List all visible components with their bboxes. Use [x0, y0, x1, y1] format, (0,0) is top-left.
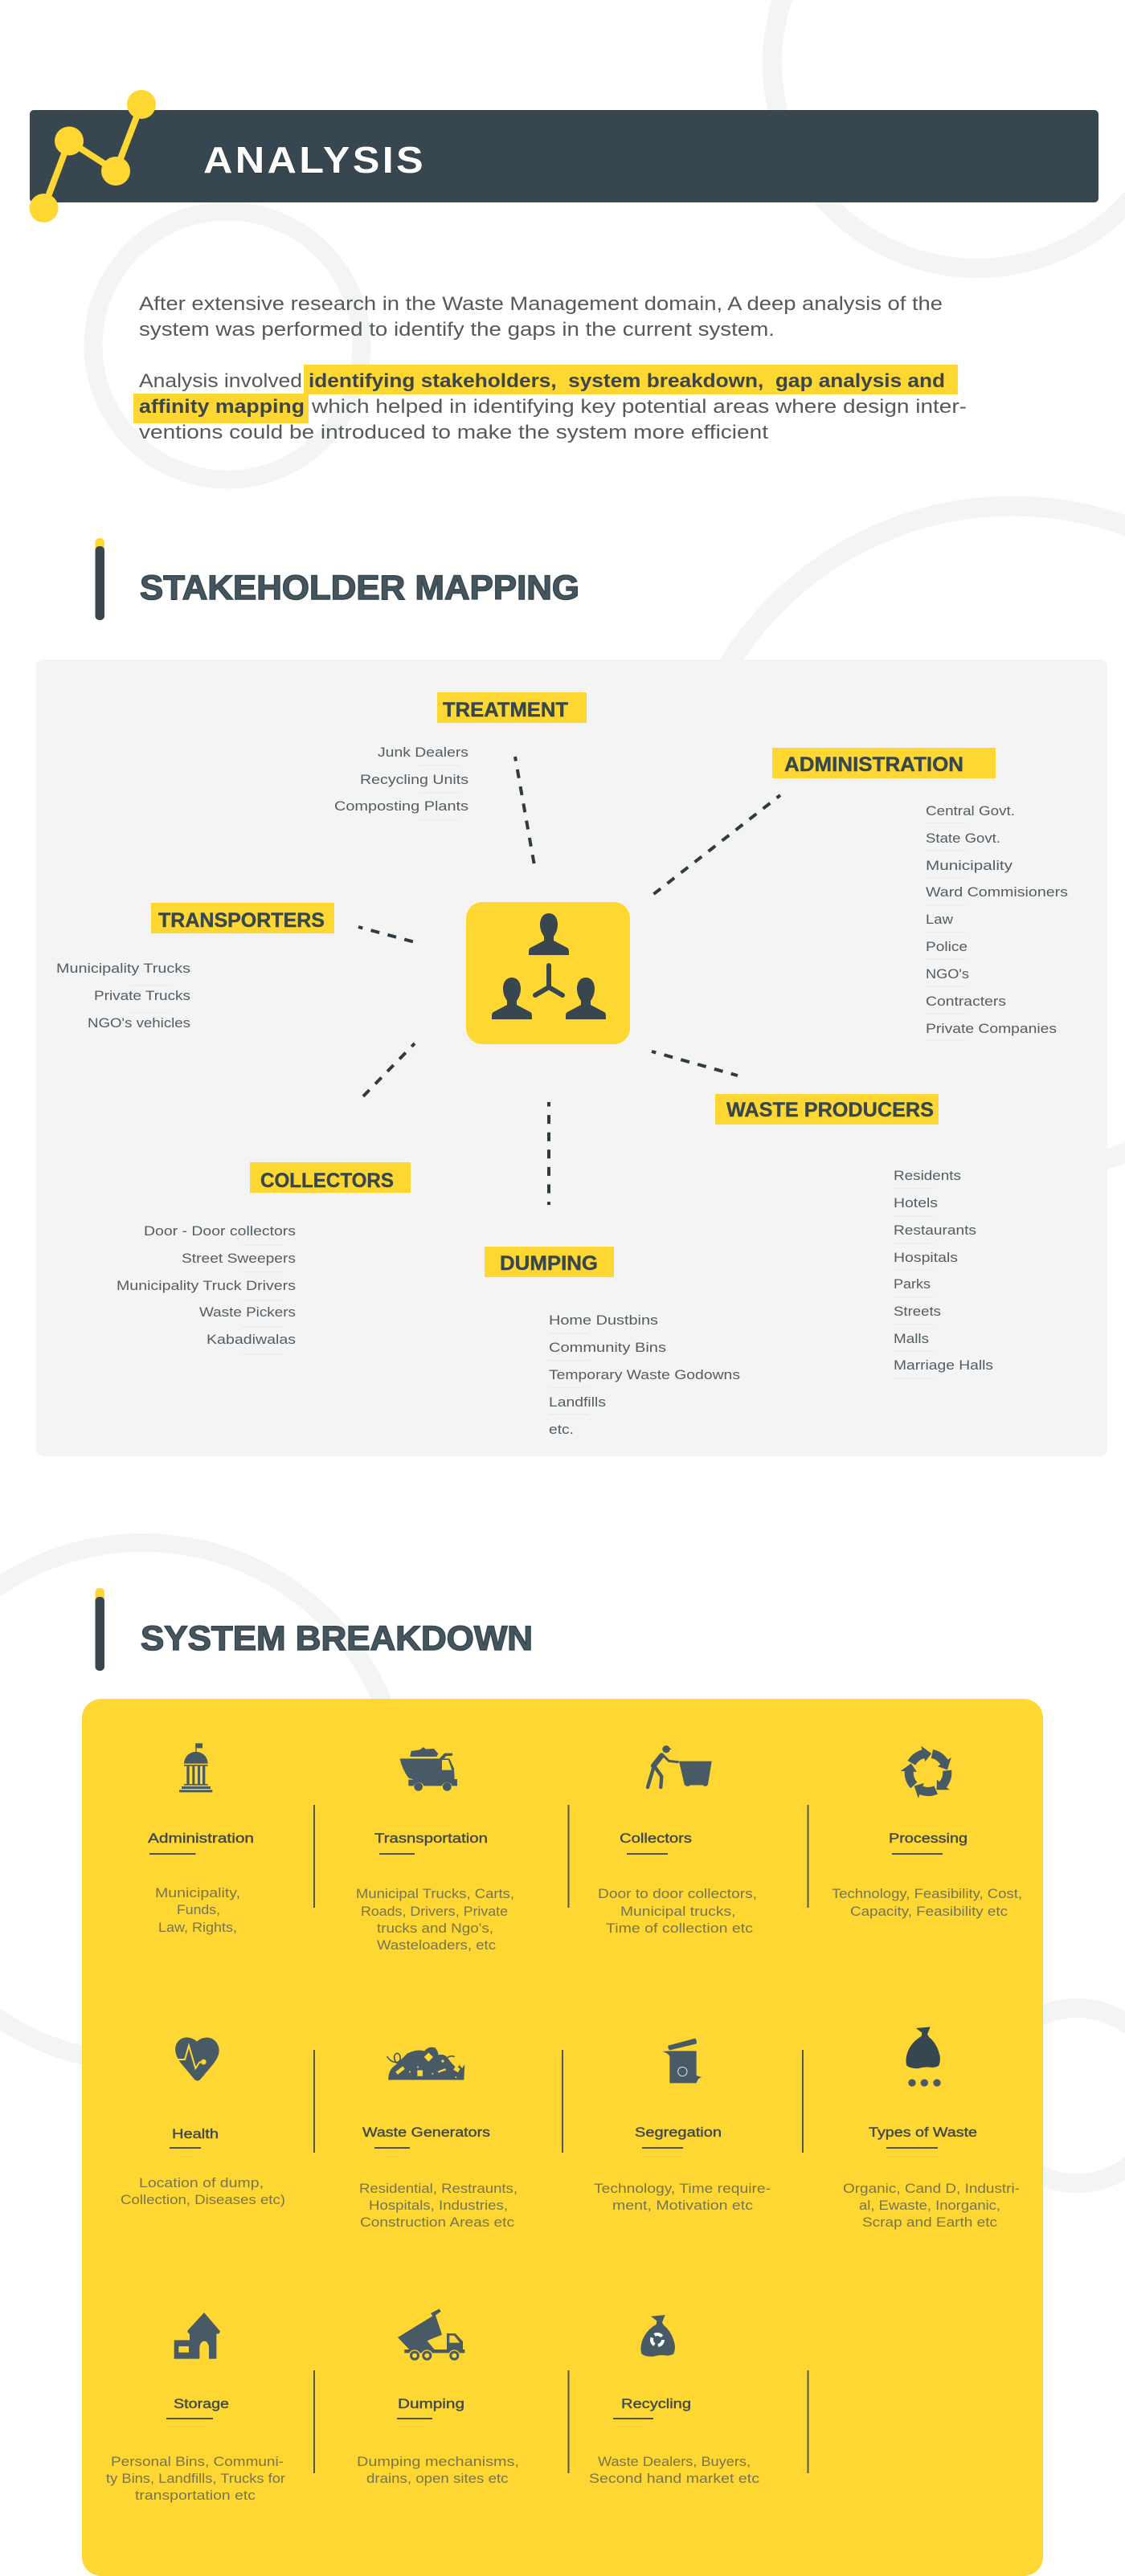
description: Residential, Restraunts,: [359, 2181, 518, 2196]
label text: WASTE PRODUCERS: [726, 1099, 934, 1121]
card: collectors: [598, 1745, 757, 1936]
card: types of waste: [843, 2027, 1020, 2230]
column dividers: [314, 1805, 808, 2473]
group: waste producers: [715, 1094, 993, 1378]
description: Technology, Time require-: [594, 2181, 771, 2196]
description: ty Bins, Landfills, Trucks for: [106, 2471, 285, 2486]
group: transporters: [56, 903, 334, 1031]
list: transporters: [56, 961, 190, 1031]
arrow: to waste producers: [652, 1051, 738, 1076]
label text: TRANSPORTERS: [158, 909, 325, 932]
intro text block: [133, 293, 967, 443]
description: Second hand market etc: [589, 2471, 760, 2486]
description: trucks and Ngo's,: [377, 1921, 493, 1936]
arrow: to treatment: [515, 757, 535, 870]
header banner: analysis: [29, 90, 1098, 222]
description: [356, 1886, 514, 1953]
underline: [374, 2147, 410, 2149]
title: Collectors: [620, 1831, 692, 1846]
paragraph line 4: which helped in identifying key potential areas where design inter-: [311, 396, 967, 418]
underline: [166, 2418, 213, 2419]
label text: TREATMENT: [443, 699, 568, 721]
heading accent bar: [95, 538, 104, 620]
description: al, Ewaste, Inorganic,: [859, 2198, 1000, 2213]
highlighted text line 4: affinity mapping: [139, 396, 305, 418]
list: administration: Central Govt.: [926, 803, 1015, 819]
centre icon: stakeholders: [466, 902, 630, 1044]
list: collectors: [117, 1223, 296, 1354]
description: drains, open sites etc: [366, 2471, 509, 2486]
group: treatment: [334, 692, 587, 821]
banner background: [30, 110, 1098, 202]
description: Municipality,: [155, 1885, 240, 1900]
description: Dumping mechanisms,: [357, 2454, 519, 2469]
description: Capacity, Feasibility etc: [850, 1904, 1008, 1919]
description: [832, 1886, 1022, 1919]
description: [121, 2175, 285, 2207]
description: [357, 2454, 519, 2486]
list: collectors: Kabadiwalas: [207, 1332, 296, 1347]
title: Processing: [889, 1831, 968, 1846]
label box: [437, 692, 587, 723]
description: Organic, Cand D, Industri-: [843, 2181, 1020, 2196]
title: Trasnsportation: [374, 1831, 488, 1846]
card: administration: [148, 1743, 254, 1935]
list: waste producers: [894, 1168, 993, 1378]
heading text: STAKEHOLDER MAPPING: [140, 569, 579, 607]
arrow: to collectors: [358, 1043, 415, 1101]
icon: dump truck: [398, 2309, 464, 2362]
arrow: to dumping: [547, 1102, 550, 1205]
label box: [715, 1094, 939, 1125]
paragraph line 3: Analysis involved: [139, 370, 302, 392]
banner title: ANALYSIS: [203, 139, 426, 181]
description: [359, 2181, 518, 2230]
paragraph line 5: ventions could be introduced to make the system more efficient: [139, 422, 768, 443]
description: Location of dump,: [139, 2175, 264, 2190]
icon: storage house: [174, 2313, 220, 2359]
panel: system breakdown: [82, 1699, 1043, 2576]
paragraph line 1: After extensive research in the Waste Management domain, A deep analysis of the: [139, 293, 943, 315]
list: administration: [926, 803, 1068, 1041]
card: storage: [106, 2313, 285, 2503]
list: waste producers: Marriage Halls: [894, 1357, 993, 1373]
description: Door to door collectors,: [598, 1886, 757, 1901]
icon: open bin: [662, 2039, 702, 2083]
list: waste producers: Parks: [894, 1276, 931, 1292]
heading: stakeholder mapping: [95, 538, 579, 620]
list: treatment: [334, 745, 468, 821]
icon: garbage bag with dots: [906, 2027, 941, 2087]
underline: [170, 2147, 201, 2149]
description: Construction Areas etc: [360, 2215, 515, 2230]
label text: ADMINISTRATION: [784, 753, 963, 776]
title: Waste Generators: [362, 2125, 490, 2140]
description: Collection, Diseases etc): [121, 2192, 285, 2207]
icon: garbage truck: [400, 1747, 457, 1791]
list: dumping: Landfills: [549, 1394, 606, 1410]
list: transporters: Private Trucks: [94, 988, 190, 1003]
label box: [485, 1247, 614, 1277]
list: waste producers: Streets: [894, 1304, 941, 1319]
icon: recycling arrows: [897, 1745, 960, 1806]
card: dumping: [357, 2309, 519, 2486]
underline: [149, 1853, 196, 1855]
card: recycling: [589, 2315, 760, 2486]
description: [594, 2181, 771, 2213]
heading accent bar: [95, 1588, 104, 1671]
title: Administration: [148, 1831, 254, 1846]
description: [155, 1885, 240, 1935]
list: waste producers: Restaurants: [894, 1223, 976, 1238]
title: Dumping: [398, 2397, 464, 2411]
description: ment, Motivation etc: [612, 2198, 754, 2213]
description: Hospitals, Industries,: [369, 2198, 508, 2213]
list: waste producers: Hotels: [894, 1195, 938, 1210]
heading: system breakdown: [95, 1588, 533, 1671]
description: Municipal trucks,: [620, 1904, 736, 1919]
description: transportation etc: [135, 2488, 256, 2503]
card: processing: [832, 1745, 1022, 1919]
list: collectors: Municipality Truck Drivers: [117, 1278, 296, 1293]
heading text: SYSTEM BREAKDOWN: [141, 1619, 533, 1658]
list: dumping: etc.: [549, 1422, 574, 1437]
arrow: to administration: [652, 795, 780, 896]
label box: [772, 748, 996, 778]
description: Law, Rights,: [158, 1920, 237, 1935]
title: Types of Waste: [869, 2125, 977, 2140]
list: administration: Contracters: [926, 994, 1006, 1009]
list: transporters: NGO's vehicles: [88, 1015, 190, 1031]
title: Health: [172, 2127, 219, 2141]
title: Recycling: [621, 2397, 691, 2411]
description: [843, 2181, 1020, 2230]
description: [589, 2454, 760, 2486]
list: collectors: Street Sweepers: [182, 1251, 296, 1266]
card: health: [121, 2037, 285, 2207]
list: administration: Municipality: [926, 858, 1013, 873]
list: treatment: Junk Dealers: [378, 745, 468, 760]
paragraph line 2: system was performed to identify the gaps in the current system.: [139, 319, 775, 341]
description: Waste Dealers, Buyers,: [598, 2454, 751, 2469]
panel background: [36, 659, 1107, 1456]
list: administration: NGO's: [926, 966, 969, 982]
description: [106, 2454, 285, 2503]
list: dumping: Home Dustbins: [549, 1312, 658, 1328]
description: Scrap and Earth etc: [862, 2215, 998, 2230]
label box: [250, 1162, 411, 1193]
underline: [627, 1853, 668, 1855]
list: administration: Private Companies: [926, 1021, 1057, 1036]
description: Technology, Feasibility, Cost,: [832, 1886, 1022, 1901]
underline: [642, 2147, 683, 2149]
underline: [892, 1853, 943, 1855]
list: collectors: Door - Door collectors: [144, 1223, 296, 1239]
description: Personal Bins, Communi-: [111, 2454, 284, 2469]
icon: government building: [179, 1743, 212, 1792]
list: dumping: Community Bins: [549, 1340, 666, 1355]
card: transportation: [356, 1747, 514, 1953]
icon: recycling bag: [640, 2315, 675, 2357]
description: [598, 1886, 757, 1936]
list: administration: Ward Commisioners: [926, 884, 1068, 900]
arrow: to transporters: [358, 927, 418, 943]
group: administration: [772, 748, 1068, 1041]
underline: [379, 1853, 415, 1855]
list: dumping: Temporary Waste Godowns: [549, 1367, 740, 1382]
underline: [886, 2147, 938, 2149]
label text: COLLECTORS: [260, 1170, 394, 1192]
title: Segregation: [635, 2125, 722, 2140]
group: dumping: [485, 1247, 740, 1437]
list: treatment: Recycling Units: [360, 772, 468, 787]
panel background: [82, 1699, 1043, 2576]
highlight: second line: [133, 394, 309, 423]
panel: stakeholder map: [36, 659, 1107, 1456]
description: Roads, Drivers, Private: [361, 1904, 508, 1919]
title: Storage: [174, 2397, 229, 2411]
highlighted text line 3: identifying stakeholders, system breakdown, gap analysis and: [309, 370, 945, 392]
description: Municipal Trucks, Carts,: [356, 1886, 514, 1901]
description: Time of collection etc: [606, 1921, 754, 1936]
description: Wasteloaders, etc: [377, 1937, 497, 1953]
list: dumping: [549, 1312, 740, 1437]
icon: waste pile: [387, 2047, 464, 2080]
group: collectors: [117, 1162, 411, 1354]
card: segregation: [594, 2039, 771, 2213]
icon: yellow line chart: [29, 90, 156, 222]
label box: [151, 903, 334, 933]
highlight: first line: [304, 365, 958, 394]
icon: worker with bin: [648, 1745, 712, 1787]
list: transporters: Municipality Trucks: [56, 961, 190, 976]
list: waste producers: Hospitals: [894, 1250, 958, 1265]
underline: [397, 2418, 432, 2419]
list: waste producers: Residents: [894, 1168, 961, 1183]
card: waste generators: [359, 2047, 518, 2230]
list: administration: Police: [926, 939, 968, 954]
list: treatment: Composting Plants: [334, 798, 468, 814]
icon: heart with pulse: [175, 2037, 219, 2080]
label text: DUMPING: [500, 1252, 598, 1275]
list: waste producers: Malls: [894, 1331, 929, 1346]
list: collectors: Waste Pickers: [199, 1304, 296, 1320]
list: administration: Law: [926, 912, 954, 927]
underline: [613, 2418, 653, 2419]
list: administration: State Govt.: [926, 831, 1000, 846]
description: Funds,: [177, 1902, 220, 1917]
